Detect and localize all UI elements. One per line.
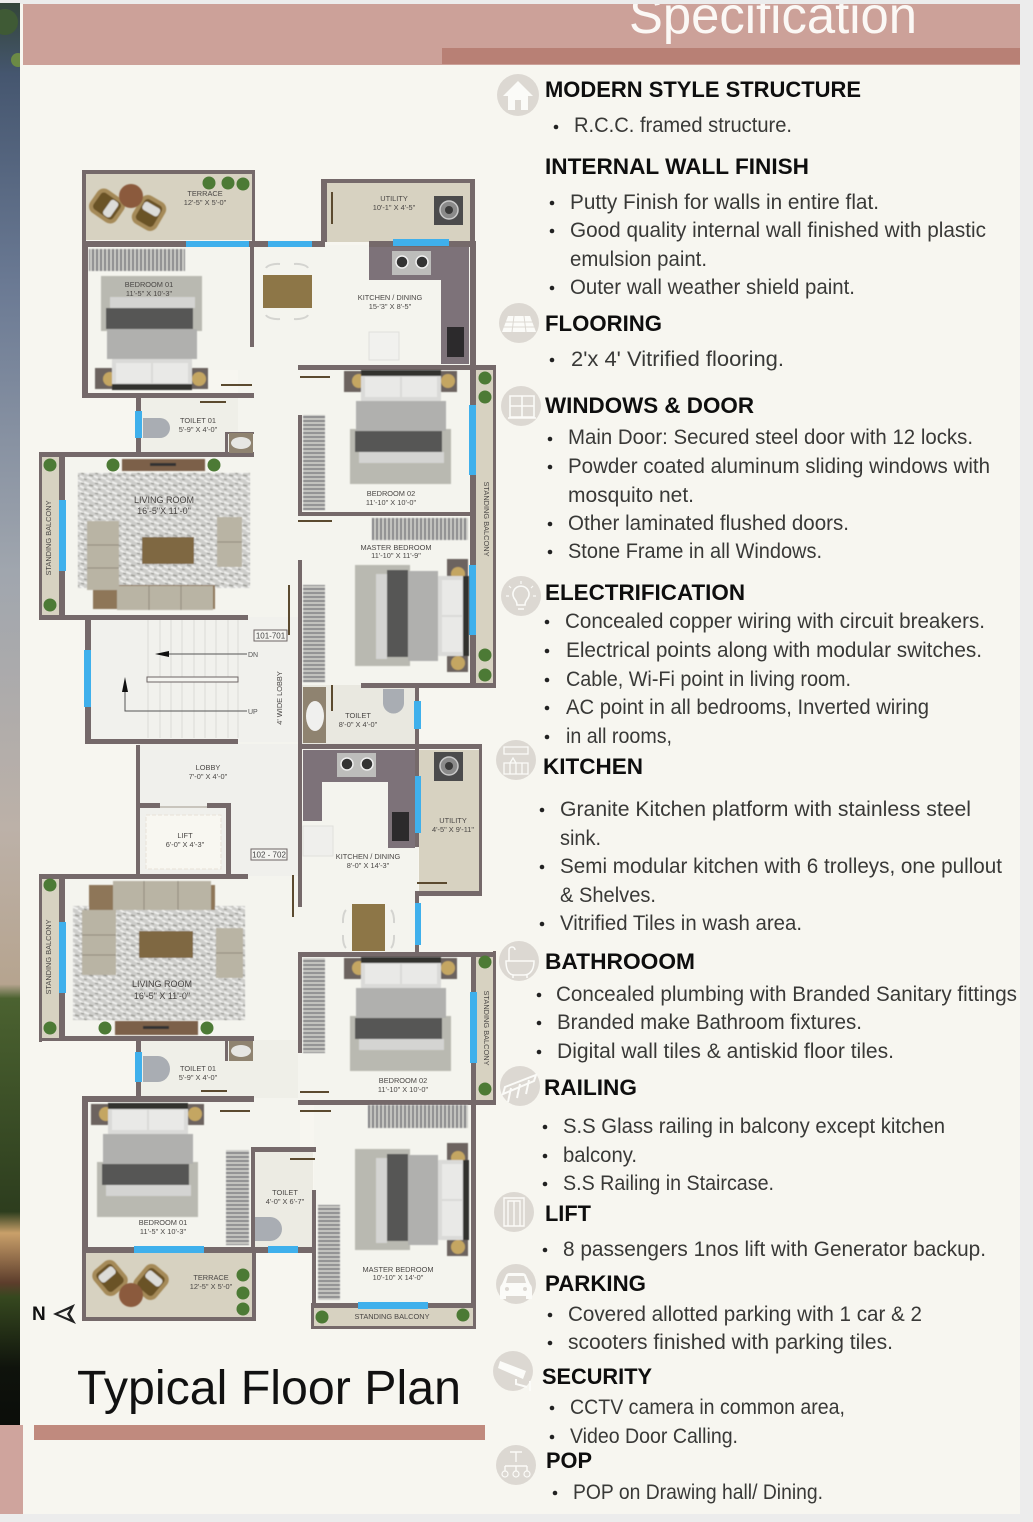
room labels: 6'-0" X 4'-3" — [166, 840, 205, 849]
spec: flooring: FLOORING — [545, 311, 662, 336]
staircase: UP — [248, 709, 258, 716]
spec: pop: POP — [546, 1448, 592, 1473]
header band — [23, 0, 1020, 65]
room labels — [44, 189, 491, 1321]
spec: electrification: ELECTRIFICATION — [545, 580, 745, 605]
spec: kitchen — [540, 754, 1002, 935]
room labels: KITCHEN / DINING — [336, 852, 400, 861]
room labels: TOILET — [345, 711, 371, 720]
spec: kitchen: & Shelves. — [560, 884, 656, 907]
room labels: 11'-10" X 10'-0" — [378, 1085, 428, 1094]
title: typical floor plan: Typical Floor Plan — [77, 1362, 461, 1415]
spec: windows and door: Main Door: Secured steel door with 12 locks. — [568, 426, 973, 449]
kitchens — [263, 196, 469, 951]
floors — [62, 245, 476, 1305]
room labels: 11'-5" X 10'-3" — [140, 1227, 186, 1236]
terrace furniture — [86, 184, 172, 1307]
room labels: LOBBY — [196, 763, 220, 772]
living room lower — [73, 881, 245, 1035]
lift — [146, 806, 221, 869]
spec: pop — [546, 1448, 823, 1504]
spec: kitchen: sink. — [560, 827, 601, 850]
room labels: 16'-5" X 11'-0" — [134, 991, 190, 1001]
spec: windows and door: Powder coated aluminum sliding windows with — [568, 455, 990, 478]
spec: bathroom: BATHROOOM — [545, 949, 695, 974]
spec: railing — [543, 1075, 945, 1195]
windows — [59, 239, 477, 1309]
spec: security: CCTV camera in common area, — [570, 1396, 845, 1419]
background photo strip — [0, 3, 20, 1425]
spec: internal wall finish: INTERNAL WALL FINISH — [545, 154, 809, 179]
spec: lift: 8 passengers 1nos lift with Generator backup. — [563, 1238, 986, 1261]
spec: windows and door — [545, 393, 990, 563]
north compass: N — [32, 1304, 46, 1325]
room labels: 8'-0" X 4'-0" — [339, 720, 378, 729]
spec: kitchen: KITCHEN — [543, 754, 643, 779]
room labels: STANDING BALCONY — [354, 1312, 430, 1321]
room labels: 4'-0" X 6'-7" — [266, 1197, 305, 1206]
room labels: 12'-5" X 5'-0" — [184, 198, 227, 207]
room labels: STANDING BALCONY — [44, 919, 53, 995]
spec: kitchen: Semi modular kitchen with 6 trolleys, one pullout — [560, 855, 1002, 878]
spec: internal wall finish — [545, 154, 986, 299]
spec: kitchen: Granite Kitchen platform with stainless steel — [560, 798, 971, 821]
room labels: 12'-5" X 5'-0" — [190, 1282, 233, 1291]
floor plan — [39, 170, 496, 1329]
room labels: STANDING BALCONY — [482, 481, 491, 557]
spec: security: Video Door Calling. — [570, 1425, 738, 1448]
spec: electrification: Cable, Wi-Fi point in living room. — [566, 668, 851, 691]
spec: windows and door: mosquito net. — [568, 484, 694, 507]
flat number tags: 101-701 — [256, 632, 286, 640]
spec: railing: balcony. — [563, 1144, 637, 1167]
spec: parking: scooters finished with parking tiles. — [568, 1331, 893, 1354]
spec: lift: LIFT — [545, 1201, 592, 1226]
icon: window — [501, 386, 541, 426]
walls — [39, 170, 496, 1329]
room labels: UTILITY — [380, 194, 408, 203]
room labels: UTILITY — [439, 816, 467, 825]
room labels: TERRACE — [187, 189, 223, 198]
spec: bathroom — [537, 949, 1017, 1063]
spec: security: SECURITY — [542, 1364, 652, 1389]
north compass — [32, 1304, 76, 1325]
lower left pink block — [0, 1425, 23, 1514]
spec: railing: RAILING — [544, 1075, 637, 1100]
room labels: 16'-5"X 11'-0" — [137, 506, 191, 516]
spec: bathroom: Branded make Bathroom fixtures. — [557, 1011, 862, 1034]
spec: windows and door: Other laminated flushed doors. — [568, 512, 849, 535]
spec: internal wall finish: emulsion paint. — [570, 248, 707, 271]
spec: modern style structure: MODERN STYLE STRUCTURE — [545, 77, 861, 102]
spec: modern style structure: R.C.C. framed structure. — [574, 114, 792, 137]
spec: electrification: AC point in all bedrooms, Inverted wiring — [566, 696, 929, 719]
icon: flooring — [499, 303, 539, 343]
icon: car — [496, 1264, 536, 1304]
spec: parking — [545, 1271, 922, 1354]
spec: windows and door: WINDOWS & DOOR — [545, 393, 754, 418]
doors — [200, 192, 447, 1160]
room labels: 10'-10" X 14'-0" — [373, 1273, 424, 1282]
spec: windows and door: Stone Frame in all Windows. — [568, 540, 822, 563]
spec: electrification: Electrical points along with modular switches. — [566, 639, 982, 662]
room labels: MASTER BEDROOM — [360, 543, 432, 552]
room labels: TERRACE — [193, 1273, 229, 1282]
spec: electrification: Concealed copper wiring with circuit breakers. — [565, 610, 985, 633]
room labels: 4' WIDE LOBBY — [275, 671, 284, 725]
staircase — [122, 620, 258, 738]
bathrooms — [143, 418, 404, 1241]
room labels: 7'-0" X 4'-0" — [189, 772, 228, 781]
room labels: TOILET 01 — [180, 1064, 216, 1073]
room labels: BEDROOM 02 — [379, 1076, 427, 1085]
room labels: BEDROOM 02 — [367, 489, 415, 498]
room labels: 8'-0" X 14'-3" — [347, 861, 390, 870]
title underline bar — [34, 1425, 485, 1440]
room labels: TOILET — [272, 1188, 298, 1197]
staircase: DN — [248, 652, 258, 659]
icon: kitchen — [496, 740, 536, 780]
spec: railing: S.S Railing in Staircase. — [563, 1172, 774, 1195]
spec: railing: S.S Glass railing in balcony except kitchen — [563, 1115, 945, 1138]
room labels: 10'-1" X 4'-5" — [373, 203, 416, 212]
room labels: 11'-10" X 11'-9" — [371, 551, 421, 560]
spec: pop: POP on Drawing hall/ Dining. — [573, 1481, 823, 1504]
spec: flooring — [545, 311, 784, 371]
spec: modern style structure — [545, 77, 861, 137]
room labels: TOILET 01 — [180, 416, 216, 425]
room labels: LIFT — [177, 831, 193, 840]
beds — [91, 276, 469, 1256]
plants — [44, 176, 492, 1324]
spec: internal wall finish: Putty Finish for walls in entire flat. — [570, 191, 879, 214]
room labels: 11'-10" X 10'-0" — [366, 498, 416, 507]
room labels: 11'-5" X 10'-3" — [126, 289, 172, 298]
spec: kitchen: Vitrified Tiles in wash area. — [560, 912, 802, 935]
icon: house — [497, 74, 539, 116]
spec: electrification — [545, 580, 985, 748]
spec: bathroom: Digital wall tiles & antiskid floor tiles. — [557, 1040, 894, 1063]
room labels: KITCHEN / DINING — [358, 293, 422, 302]
icon: bathtub — [499, 941, 539, 981]
spec: parking: PARKING — [545, 1271, 646, 1296]
icon: pop ceiling light — [496, 1445, 536, 1485]
room labels: STANDING BALCONY — [44, 500, 53, 576]
spec: security — [542, 1364, 845, 1448]
spec: bathroom: Concealed plumbing with Branded Sanitary fittings — [556, 983, 1017, 1006]
flat number tags — [251, 630, 287, 860]
spec: internal wall finish: Outer wall weather shield paint. — [570, 276, 855, 299]
room labels: LIVING ROOM — [134, 495, 194, 505]
room labels: 5'-9" X 4'-0" — [179, 425, 218, 434]
room labels: 5'-9" X 4'-0" — [179, 1073, 218, 1082]
spec: lift — [543, 1201, 986, 1261]
flat number tags: 102 - 702 — [252, 850, 286, 860]
spec: flooring: 2'x 4' Vitrified flooring. — [571, 348, 784, 371]
room labels: 15-'3" X 8'-5" — [369, 302, 412, 311]
outdoor stone areas — [40, 172, 495, 1327]
icon: lift — [494, 1192, 534, 1232]
spec: internal wall finish: Good quality internal wall finished with plastic — [570, 219, 986, 242]
room labels: LIVING ROOM — [132, 979, 192, 989]
spec: parking: Covered allotted parking with 1 car & 2 — [568, 1303, 922, 1326]
room labels: BEDROOM 01 — [139, 1218, 187, 1227]
icon: security camera — [493, 1351, 533, 1391]
icon: light bulb — [501, 576, 541, 616]
wardrobes — [89, 249, 468, 1300]
room labels: 4'-5" X 9'-11" — [432, 825, 474, 834]
room labels: BEDROOM 01 — [125, 280, 173, 289]
room labels: MASTER BEDROOM — [362, 1265, 434, 1274]
room labels: STANDING BALCONY — [482, 990, 491, 1066]
spec: electrification: in all rooms, — [566, 725, 672, 748]
icon: railing — [500, 1066, 540, 1106]
living room upper — [78, 459, 250, 610]
